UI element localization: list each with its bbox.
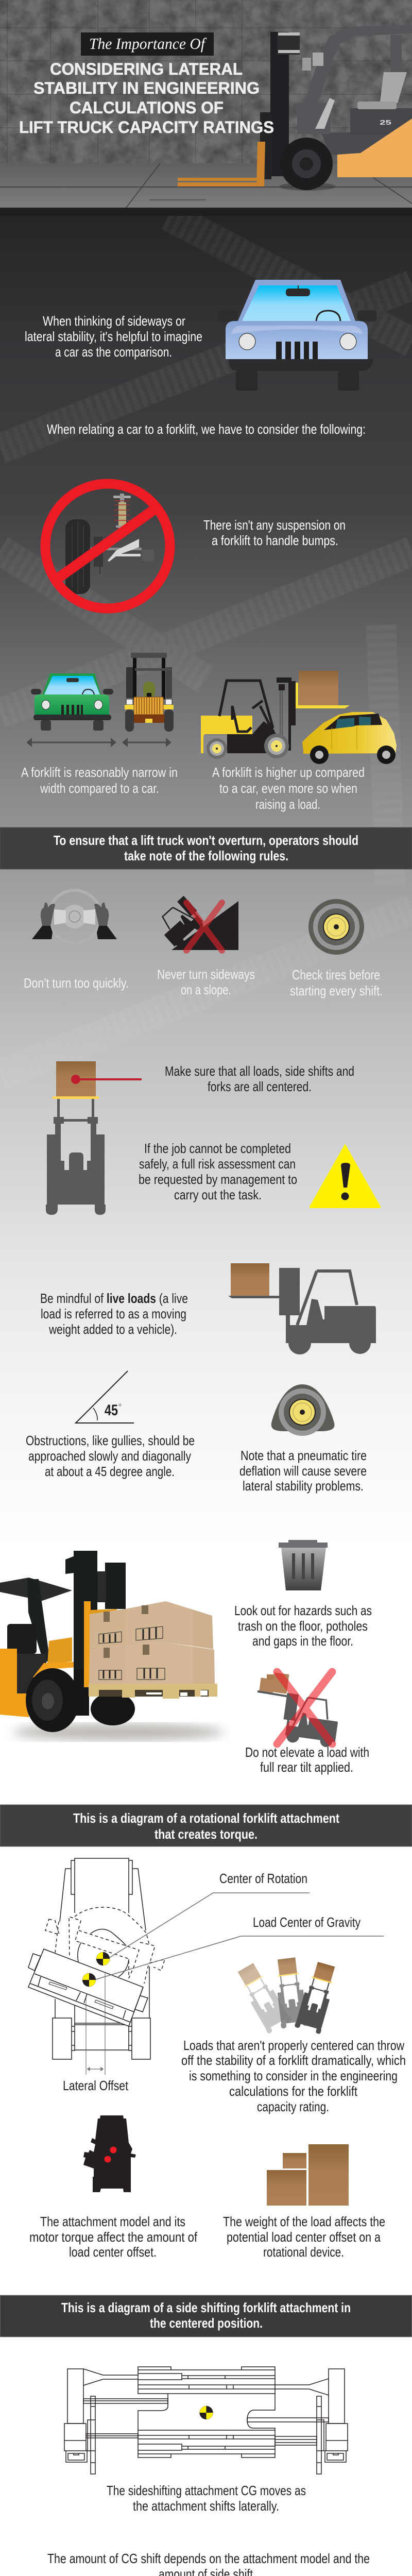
- title block: [19, 32, 274, 137]
- text: risk assessment: carry out the task.: [174, 1187, 262, 1202]
- concrete wall: [0, 0, 412, 163]
- cardboard boxes: [89, 1601, 215, 1684]
- diagram: rotational attachment: [28, 1858, 384, 2075]
- icon: tire: [308, 899, 364, 955]
- diagram: side shifter centered: [64, 2367, 348, 2474]
- center of rotation marker: [96, 1952, 110, 1965]
- load center of gravity marker: [82, 1973, 96, 1987]
- text: risk assessment: safely, a full risk assessment can: [139, 1156, 296, 1172]
- rule captions: Check tires before: [292, 967, 380, 982]
- rotated carriage: [28, 1949, 148, 2026]
- text: centered: Make sure that all loads, side shifts and: [165, 1063, 354, 1079]
- text: obstructions: Obstructions, like gullies, should be: [26, 1433, 195, 1448]
- section band: side shifting attachment: the centered position.: [150, 2315, 263, 2331]
- title text: CONSIDERING LATERAL: [50, 60, 243, 78]
- section band: rotational attachment: This is a diagram of a rotational forklift attachment: [73, 1810, 339, 1826]
- text: live loads: weight added to a vehicle).: [48, 1321, 177, 1337]
- text: hazards: [234, 1603, 372, 1649]
- arrows: width comparison: [26, 738, 171, 747]
- intro text: a car as the comparison.: [55, 344, 172, 360]
- text: hazards: trash on the floor, potholes: [238, 1618, 368, 1634]
- icon: green car front view: [31, 673, 113, 731]
- section band: rules: take note of the following rules.: [124, 848, 288, 863]
- text: sideshifting CG: The sideshifting attachment CG moves as: [107, 2483, 306, 2498]
- icon: side forklift silhouette with box: [228, 1263, 376, 1354]
- subtitle box: The Importance Of: [89, 35, 207, 53]
- text: no suspension: There isn't any suspension on: [203, 517, 346, 533]
- intro text: lateral stability, it's helpful to imagine: [25, 329, 202, 344]
- text: narrow in width: width compared to a car.: [40, 781, 159, 796]
- text: no suspension: a forklift to handle bumps.: [212, 533, 338, 548]
- rule captions: Never turn sideways: [157, 967, 255, 982]
- text: hazards: and gaps in the floor.: [252, 1633, 353, 1649]
- text: centered: forks are all centered.: [208, 1079, 312, 1094]
- text: higher up: to a car, even more so when: [219, 781, 357, 796]
- text: sideshifting CG: the attachment shifts laterally.: [133, 2498, 279, 2514]
- icon: blue car front view: [217, 280, 377, 391]
- title text: [19, 60, 274, 137]
- text: higher up: A forklift is higher up compared: [212, 765, 365, 780]
- text: amount of CG shift: [47, 2551, 370, 2576]
- text: do not elevate: full rear tilt applied.: [260, 1759, 353, 1775]
- section band: side shifting attachment: [0, 2295, 412, 2337]
- forklift in header: [178, 25, 412, 191]
- rule captions: Don't turn too quickly.: [24, 975, 129, 991]
- text: sideshifting CG: [107, 2483, 306, 2514]
- title text: STABILITY IN ENGINEERING: [33, 79, 260, 97]
- text: loads not centered: [181, 2038, 406, 2114]
- icon: forklift tipping on slope with red X: [153, 896, 238, 951]
- rule captions: on a slope.: [181, 982, 231, 997]
- text: pneumatic tire: lateral stability problems.: [243, 1478, 364, 1494]
- icon: forklift front silhouette with centered load: [46, 1061, 142, 1215]
- wooden pallet: [89, 1684, 217, 1699]
- text: higher up: [212, 765, 365, 812]
- text: live loads: Be mindful of live loads (a live: [40, 1291, 188, 1306]
- text: attachment model: load center offset.: [69, 2244, 157, 2260]
- text: narrow in width: A forklift is reasonably narrow in: [21, 765, 178, 780]
- text: pneumatic tire: deflation will cause severe: [239, 1463, 367, 1479]
- text: live loads: load is referred to as a moving: [41, 1306, 186, 1321]
- title text: LIFT TRUCK CAPACITY RATINGS: [19, 118, 274, 137]
- dashed rotation arc: [45, 1907, 165, 1984]
- center of gravity leader lines: [91, 1893, 384, 1981]
- rule captions: [24, 967, 383, 998]
- text: risk assessment: If the job cannot be completed: [144, 1141, 291, 1156]
- forklift in header: 25: [380, 118, 391, 126]
- rule captions: starting every shift.: [290, 983, 383, 998]
- text: no suspension: [203, 517, 346, 548]
- attachment CG marker: [200, 2406, 213, 2419]
- icon: trash can: [279, 1540, 328, 1590]
- section band: rotational attachment: that creates torque.: [154, 1826, 258, 1842]
- concrete floor: [0, 163, 412, 208]
- icon: small yellow car: [302, 712, 397, 764]
- icon: no suspension prohibition sign: [45, 484, 170, 608]
- text: pneumatic tire: [239, 1448, 367, 1494]
- text: attachment model: [29, 2214, 198, 2260]
- text: weight of load: [223, 2214, 385, 2260]
- text: weight of load: rotational device.: [263, 2244, 344, 2260]
- icon: motor attachment silhouette: [83, 2115, 136, 2192]
- text: higher up: raising a load.: [255, 796, 320, 812]
- text: obstructions: at about a 45 degree angle.: [45, 1464, 175, 1479]
- text: risk assessment: [139, 1141, 297, 1202]
- section band: side shifting attachment: This is a diagram of a side shifting forklift attachment in: [61, 2300, 351, 2315]
- icon: three tilting forklifts: [234, 1957, 339, 2035]
- text: centered: [165, 1063, 354, 1094]
- text: attachment model: motor torque affect the amount of: [29, 2229, 198, 2245]
- text: loads not centered: calculations for the forklift: [229, 2083, 358, 2099]
- text: live loads: [40, 1291, 188, 1337]
- icon: 45 degree angle: 45: [105, 1402, 118, 1419]
- icon: stacked boxes: [267, 2144, 349, 2206]
- icon: hands on steering wheel: [32, 890, 117, 943]
- text: narrow in width: [21, 765, 178, 796]
- icon: 45 degree angle: [76, 1371, 134, 1423]
- intro text: When thinking of sideways or: [43, 313, 185, 329]
- label: load center of gravity: Load Center of Gravity: [253, 1914, 360, 1930]
- text: loads not centered: capacity rating.: [257, 2099, 329, 2114]
- text: hazards: Look out for hazards such as: [234, 1603, 372, 1618]
- section band: rules: [0, 827, 412, 869]
- icon: warning triangle: [310, 1144, 381, 1208]
- icon: forklift front view: [125, 653, 174, 732]
- title text: CALCULATIONS OF: [70, 98, 224, 117]
- text: obstructions: approached slowly and diagonally: [28, 1448, 191, 1464]
- text: obstructions: [26, 1433, 195, 1479]
- text: risk assessment: be requested by management to: [139, 1172, 297, 1187]
- text: attachment model: The attachment model and its: [40, 2214, 185, 2229]
- label: center of rotation: Center of Rotation: [219, 1871, 307, 1886]
- icon: forklift with full rear tilt and red X: [258, 1672, 341, 1749]
- header photo: forklift against concrete wall: [0, 0, 412, 208]
- icon: yellow forklift with raised load: [201, 671, 350, 759]
- icon: flat tire: [271, 1384, 334, 1436]
- label: lateral offset: Lateral Offset: [63, 2078, 129, 2093]
- text: pneumatic tire: Note that a pneumatic tire: [241, 1448, 367, 1463]
- dark strip under header: [0, 208, 412, 216]
- text: do not elevate: Do not elevate a load with: [245, 1744, 369, 1760]
- section band: rotational attachment: [0, 1805, 412, 1846]
- text: weight of load: potential load center offset on a: [227, 2229, 381, 2245]
- tire track background pattern: [0, 216, 412, 1075]
- text: do not elevate: [245, 1744, 369, 1775]
- intro text: [25, 313, 202, 360]
- photo: forklift carrying boxes: [0, 1551, 224, 1740]
